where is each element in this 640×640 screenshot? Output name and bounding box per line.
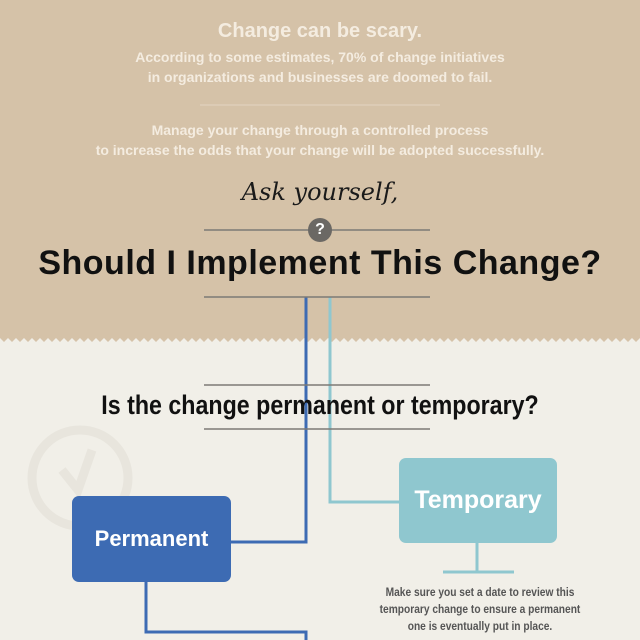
note: Make sure you set a date to review this [386,585,574,599]
intro text: to increase the odds that your change will be adopted successfully. [96,142,544,158]
intro text [96,20,544,158]
intro text: in organizations and businesses are doomed to fail. [148,69,492,85]
note: one is eventually put in place. [408,619,552,633]
question: Is the change permanent or temporary? [101,390,539,420]
box: permanent: Permanent [95,526,208,551]
box: temporary: Temporary [414,486,542,514]
ask yourself: Ask yourself, [242,178,398,206]
faint clock [32,430,128,526]
connectors [146,297,514,640]
icon: question: ? [315,221,325,238]
box: permanent [72,496,231,582]
intro text: Change can be scary. [218,20,422,42]
title: Should I Implement This Change? [38,244,602,282]
intro text: According to some estimates, 70% of change initiatives [135,49,505,65]
icon: question [308,218,332,242]
note [380,585,580,633]
intro text: Manage your change through a controlled process [152,122,488,138]
box: temporary [399,458,557,543]
note: temporary change to ensure a permanent [380,602,580,616]
